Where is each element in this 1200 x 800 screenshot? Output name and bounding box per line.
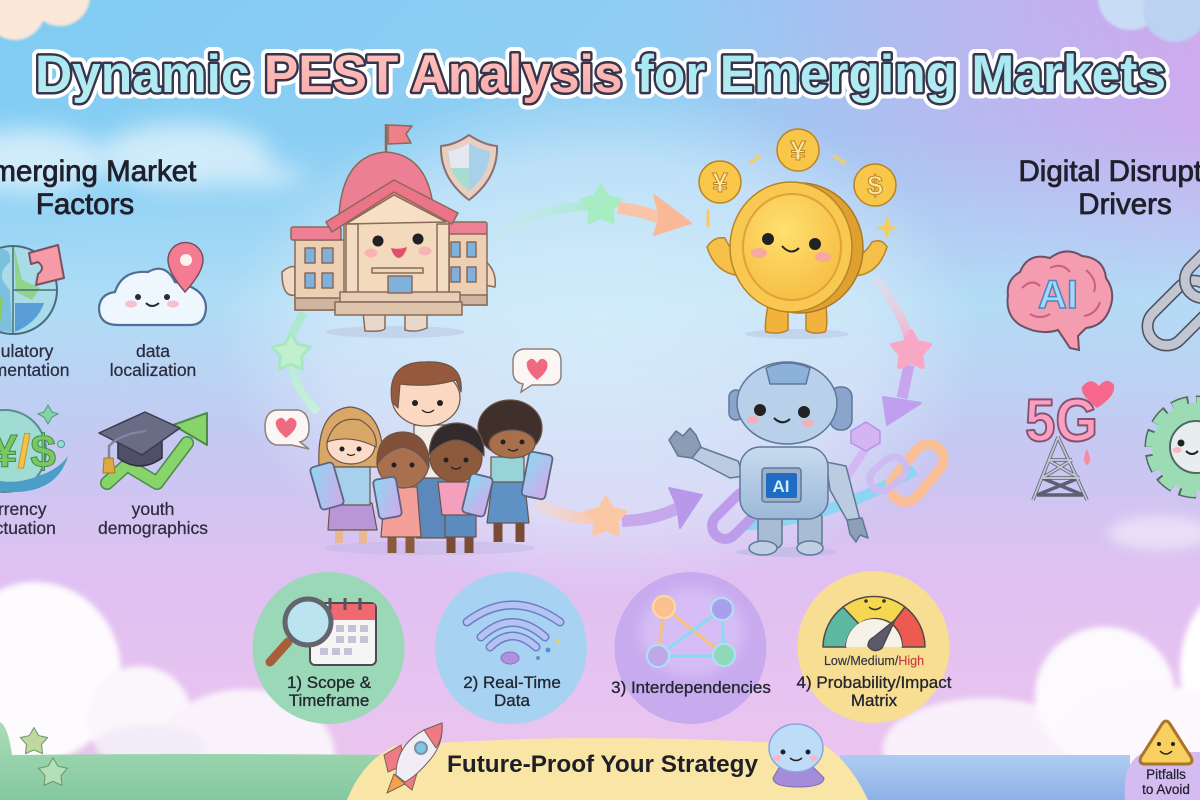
banner: future-proof your strategy (347, 738, 868, 800)
icon: blockchain links (1140, 231, 1200, 353)
icon: yen coin top: ¥ (790, 135, 806, 166)
icon: rocket (384, 723, 442, 793)
illustration: group of people with phones (309, 362, 553, 555)
icon: yen coin left: ¥ (712, 167, 728, 198)
ground: green hill left (0, 722, 400, 800)
ground: lavender mound behind pitfalls (1125, 752, 1200, 800)
cloud: bottom right (883, 588, 1200, 798)
step 1 badge (252, 572, 404, 724)
boy in pink shirt (429, 423, 484, 553)
label: low medium high scale: Low/Medium/High (824, 654, 924, 668)
text: banner label: Future-Proof Your Strategy (447, 751, 759, 778)
title: Dynamic PEST Analysis for Emerging Markets (35, 45, 1166, 104)
cloud: bottom left (0, 582, 335, 800)
icon: yen coin left (699, 161, 741, 203)
illustration: coin character (707, 182, 887, 339)
label: probability impact matrix: Matrix (851, 691, 898, 710)
icon: globe with puzzle piece (0, 245, 64, 334)
icon: network nodes (640, 588, 744, 676)
icon: smiling gear (1152, 403, 1200, 491)
icon: cloud with pin (99, 243, 206, 325)
icon: heart speech bubble left (265, 410, 309, 449)
girl in pink dress (377, 432, 429, 553)
icon: dollar coin right (854, 164, 896, 206)
icon: 5G tower: 5G (1025, 387, 1098, 454)
text: pitfalls to avoid: Pitfalls (1146, 767, 1186, 782)
icon: magnifier and calendar (270, 598, 376, 665)
arrow: social to technological (535, 488, 702, 534)
icon: yen coin top (777, 129, 819, 171)
arrow: social to political (272, 313, 318, 412)
cloud: top right corner (1098, 0, 1200, 42)
icon: wifi signal (467, 605, 560, 664)
arrow: economic to technological (874, 277, 930, 425)
illustration: robot with AI chip (669, 362, 868, 557)
illustration: blockchain links behind robot (707, 422, 950, 544)
decorative sparks (708, 156, 897, 238)
heading: emerging market factors: Factors (36, 188, 134, 221)
icon: 5G tower (1025, 381, 1114, 500)
icon: gauge meter (823, 596, 925, 651)
girl with blonde hair (319, 407, 383, 543)
step 3 badge (611, 572, 771, 724)
label: scope and timeframe: 1) Scope & (287, 673, 372, 692)
label: interdependencies: 3) Interdependencies (611, 678, 771, 697)
text: youth demographics: demographics (98, 518, 208, 538)
step 2 badge (435, 572, 587, 724)
girl with dark curly hair (478, 400, 542, 542)
label: real-time data: 2) Real-Time (463, 673, 561, 692)
icon: warning triangle (1140, 721, 1192, 764)
icon: AI brain: AI (1038, 273, 1078, 317)
illustration: government building (282, 124, 495, 338)
icon: currency wave (0, 405, 68, 492)
label: probability impact matrix: 4) Probability/Impact (797, 673, 952, 692)
cloud: top left corner (0, 0, 90, 40)
icon: crystal ball (769, 724, 824, 787)
ground: blue hill right (840, 755, 1130, 800)
arrow: political to economic (493, 186, 691, 237)
label: real-time data: Data (494, 691, 530, 710)
text: data localization: localization (110, 360, 196, 380)
panel: digital disruption drivers (1008, 155, 1200, 500)
heading: digital disruption drivers: Drivers (1078, 188, 1172, 221)
step 4 badge (797, 571, 952, 723)
text: youth demographics: youth (132, 499, 174, 519)
callout: pitfalls to avoid (1140, 721, 1192, 797)
adult figure (391, 362, 461, 538)
icon: graduation cap with rising arrow (99, 412, 207, 483)
icon: AI brain (1008, 251, 1112, 350)
icon: shield (441, 135, 497, 200)
text: pitfalls to avoid: to Avoid (1142, 782, 1190, 797)
title: Dynamic PEST Analysis for Emerging Markets (35, 45, 1166, 104)
icon: heart speech bubble right (513, 349, 561, 392)
icon: dollar coin right: $ (867, 170, 883, 201)
phones (309, 451, 553, 520)
panel: emerging market factors (0, 155, 208, 538)
text: data localization: data (136, 341, 170, 361)
title: Dynamic PEST Analysis for Emerging Markets (35, 45, 1166, 104)
illustration: robot with AI chip: AI (772, 477, 790, 496)
label: scope and timeframe: Timeframe (289, 691, 369, 710)
icon: stars on green hill (20, 728, 67, 785)
